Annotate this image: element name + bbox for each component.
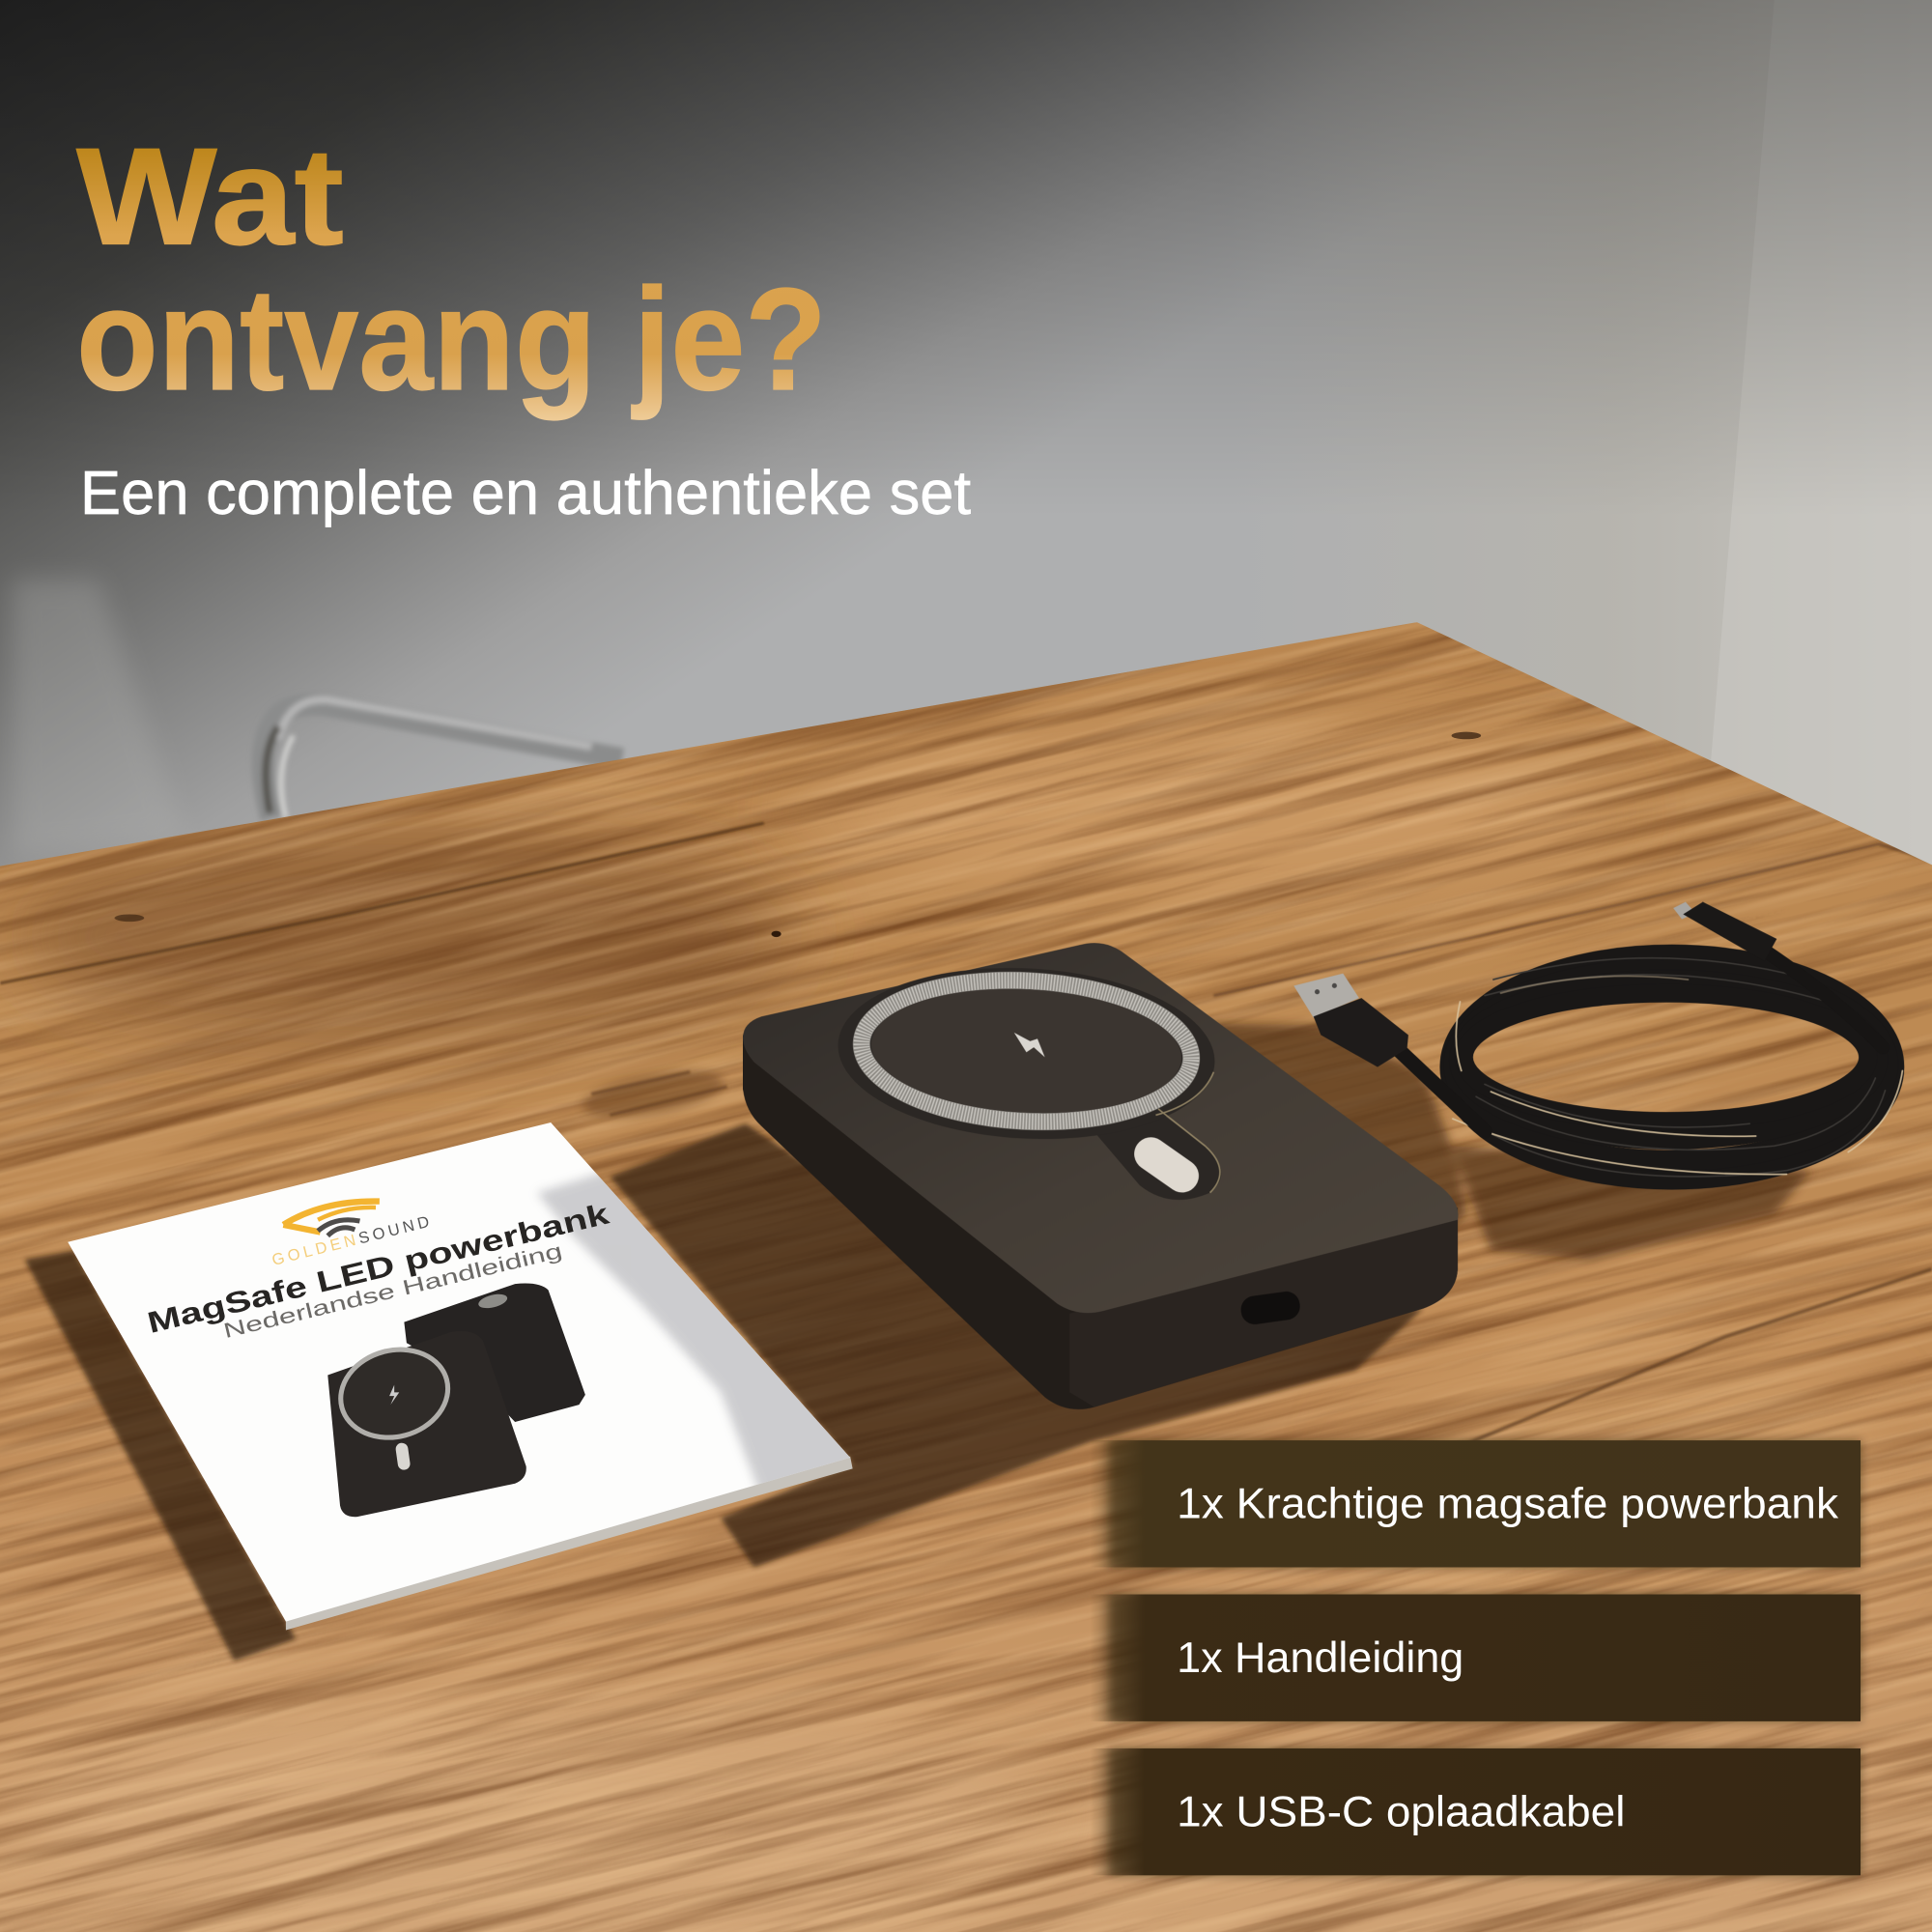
cable lead to USB-C xyxy=(1762,949,1883,1047)
logo wordmark: GOLDENSOUND xyxy=(270,1212,431,1269)
title line one: Wat xyxy=(76,121,344,274)
booklet title: MagSafe LED powerbank xyxy=(144,1197,613,1340)
ring ticks xyxy=(858,972,1195,1130)
title line two: ontvang je? xyxy=(76,258,827,420)
magsafe stem xyxy=(1091,1106,1221,1200)
booklet product image: front powerbank xyxy=(327,1331,526,1517)
wooden table xyxy=(0,622,1932,1932)
list item: cable: 1x USB-C oplaadkabel xyxy=(1177,1788,1625,1835)
list item: powerbank: 1x Krachtige magsafe powerbank xyxy=(1177,1480,1839,1527)
lightning icon xyxy=(1014,1033,1045,1057)
blurred metal chair rail xyxy=(263,699,622,818)
booklet shadow patch xyxy=(537,1171,850,1486)
background wall xyxy=(0,0,1932,887)
black USB cable coil xyxy=(1399,949,1902,1179)
logo wifi icon xyxy=(283,1202,380,1236)
shadow cast by powerbank xyxy=(610,1123,1423,1567)
USB-C connector xyxy=(1673,902,1776,961)
USB-A connector xyxy=(1293,974,1408,1067)
list item: manual xyxy=(1091,1595,1861,1721)
heading xyxy=(76,121,971,527)
booklet subtitle: Nederlandse Handleiding xyxy=(221,1238,564,1343)
booklet product image: rear powerbank xyxy=(404,1284,585,1422)
cable lead to USB-A xyxy=(1399,1050,1485,1131)
subtitle: Een complete en authentieke set xyxy=(80,458,971,527)
shadow between powerbank and cable xyxy=(1182,1023,1811,1260)
list item: manual: 1x Handleiding xyxy=(1177,1634,1463,1682)
magsafe inner disc xyxy=(868,981,1184,1121)
coil loops xyxy=(1450,955,1893,1179)
powerbank body sides xyxy=(743,1035,1458,1409)
white pill button xyxy=(1127,1131,1206,1199)
wood seams and knots xyxy=(0,823,1932,1454)
list item: powerbank xyxy=(1091,1440,1861,1567)
magsafe ring xyxy=(858,972,1195,1130)
coil highlights xyxy=(1453,976,1902,1175)
rim reflections xyxy=(1155,1072,1220,1193)
instruction booklet xyxy=(68,1122,887,1631)
booklet product image: rear emblem xyxy=(477,1292,509,1311)
powerbank top face xyxy=(743,943,1458,1313)
magsafe disc xyxy=(834,958,1219,1149)
shadow under booklet xyxy=(25,1251,296,1661)
USB-C port xyxy=(1239,1290,1301,1326)
list item: cable xyxy=(1091,1748,1861,1875)
coil loop separators xyxy=(1476,958,1886,1177)
powerbank xyxy=(743,943,1458,1409)
